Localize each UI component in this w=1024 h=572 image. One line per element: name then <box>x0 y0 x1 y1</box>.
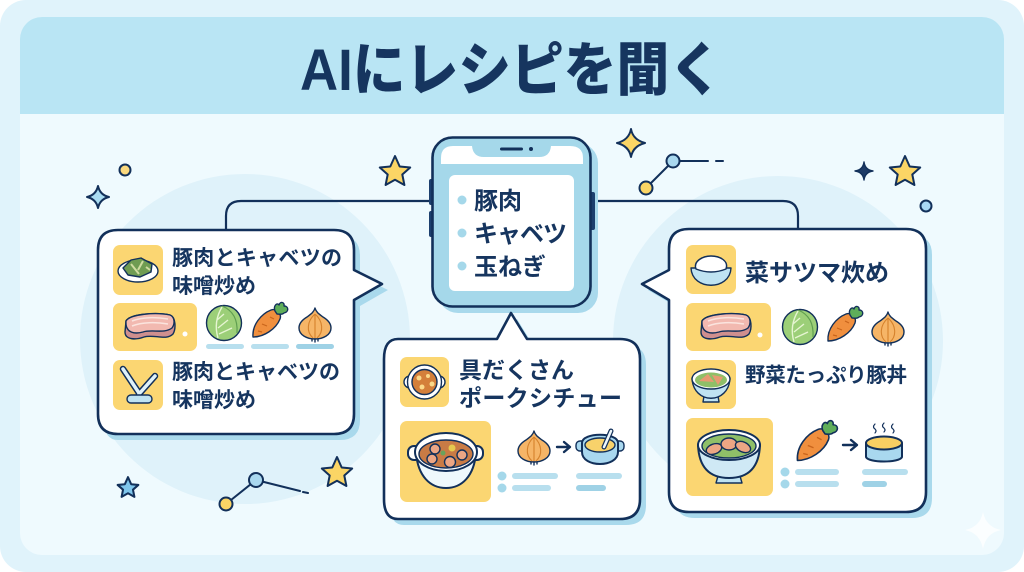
icon: onion <box>518 431 550 465</box>
heading: recipe 2 <box>172 361 340 412</box>
decoration: yellow star bottom <box>322 457 352 486</box>
icon: meat tile <box>686 303 771 351</box>
icon: cabbage <box>782 310 818 344</box>
arrow <box>843 440 857 450</box>
decoration: sparkle left <box>87 186 109 208</box>
icon: steaming pot <box>866 423 902 462</box>
icon: rice bowl <box>686 245 736 294</box>
icon: salad plate <box>113 245 163 295</box>
arrow <box>557 442 570 452</box>
phone speaker <box>500 147 533 151</box>
icon: carrot <box>797 421 837 460</box>
decoration: yellow star right <box>890 156 920 185</box>
icon: pork bowl small <box>686 360 736 409</box>
heading: recipe 3: 具だくさん <box>459 357 574 383</box>
icon: cabbage <box>206 306 242 340</box>
title banner <box>20 17 1004 114</box>
heading: recipe 1: 豚肉とキャベツの <box>172 247 342 270</box>
panel: centre recipe bubble <box>384 313 646 525</box>
heading: recipe 4: 菜サツマ炊め <box>745 260 889 287</box>
bubble body <box>384 313 640 519</box>
decoration: star top centre <box>380 156 410 185</box>
decoration: blue star bottom left <box>118 477 138 497</box>
heading: recipe 1: 味噌炒め <box>172 275 256 298</box>
decoration: node connector bottom <box>220 473 308 510</box>
icon: onion <box>299 308 331 342</box>
ingredient label bars <box>206 344 334 349</box>
phone side buttons <box>429 179 595 237</box>
icon: meat tile <box>113 303 197 351</box>
phone <box>429 138 598 313</box>
title: AIにレシピを聞く <box>300 38 722 103</box>
heading: recipe 2: 豚肉とキャベツの <box>172 361 340 384</box>
bubble shadow <box>648 235 932 518</box>
heading: recipe 3: ポークシチュー <box>459 385 622 411</box>
text placeholder lines <box>780 468 908 488</box>
decoration: sparkle top centre <box>617 129 645 157</box>
icon: carrot <box>828 306 863 341</box>
heading: recipe 5: 野菜たっぷり豚丼 <box>745 364 907 387</box>
phone shadow <box>438 143 598 313</box>
bubble shadow <box>390 319 646 525</box>
connector right <box>590 201 798 231</box>
bubble body <box>642 229 926 512</box>
text placeholder lines <box>498 472 622 492</box>
icon: cutlery <box>113 360 163 410</box>
list item: onion: 玉ねぎ <box>474 253 546 281</box>
icon: pork bowl large <box>686 418 773 496</box>
bubble shadow <box>104 236 388 440</box>
decoration: white sparkle corner <box>965 512 1001 549</box>
list item: cabbage: キャベツ <box>474 221 567 248</box>
phone screen list <box>449 175 574 291</box>
icon: stew large <box>400 421 491 502</box>
background circle left <box>80 174 410 504</box>
bubble body <box>98 230 382 434</box>
decoration: dot right <box>920 200 932 212</box>
list item: pork: 豚肉 <box>474 188 522 215</box>
heading: recipe 1 <box>172 247 342 298</box>
phone top area <box>441 146 583 164</box>
decoration: dot top left <box>120 164 130 176</box>
decoration: node connector top <box>640 154 723 194</box>
decoration: dark sparkle right <box>855 162 873 180</box>
background circle right <box>613 176 943 506</box>
phone body <box>432 138 590 306</box>
heading: recipe 2: 味噌炒め <box>172 389 256 412</box>
heading: recipe 3 <box>459 357 622 411</box>
icon: carrot <box>253 302 288 337</box>
panel: right recipe bubble <box>642 229 932 518</box>
connector left <box>226 201 432 232</box>
icon: cooking pot <box>576 431 624 464</box>
icon: onion <box>872 312 904 346</box>
icon: stew small <box>400 357 449 407</box>
panel: left recipe bubble <box>98 230 388 440</box>
